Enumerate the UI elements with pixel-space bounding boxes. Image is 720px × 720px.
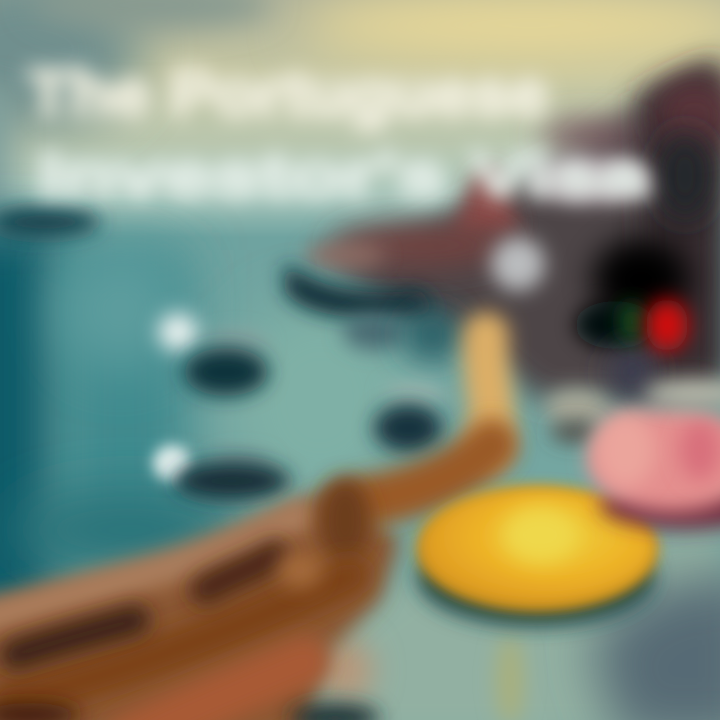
icon: Portuguese flag <box>622 299 688 351</box>
title: Investor's Visa <box>38 141 649 210</box>
boat: middle <box>374 383 445 452</box>
rope: mass behind strands <box>0 490 400 720</box>
sky: colour washes <box>0 0 720 220</box>
sea: teal shading <box>0 225 410 625</box>
boat: lower <box>153 445 290 500</box>
dark object at bottom edge <box>290 704 380 720</box>
icon: gold coin <box>417 488 657 626</box>
foreground stone ground <box>300 530 720 720</box>
pink bowl on the right <box>588 379 720 529</box>
distant dark boat on horizon <box>0 208 100 236</box>
rope: lower coils <box>0 552 350 720</box>
title <box>28 56 649 210</box>
rope: vertical golden rope <box>485 335 491 450</box>
rope: main brown rope <box>0 445 492 620</box>
panel: coastal town and cliffs <box>285 60 720 442</box>
title: The Portuguese <box>28 56 548 130</box>
boat: upper <box>158 313 268 396</box>
